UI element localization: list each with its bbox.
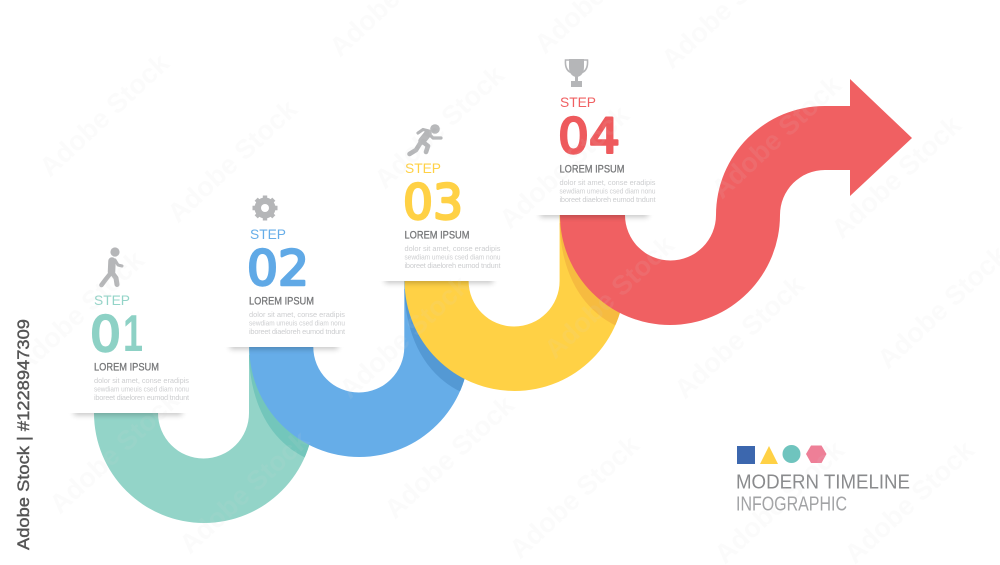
step 1 text block [94, 362, 189, 402]
step 2 text block [249, 296, 345, 336]
step 3 text block [404, 230, 501, 270]
icon: running person [410, 124, 441, 154]
step 4 label: STEP [560, 94, 596, 110]
step 4 number: 04 [558, 109, 620, 165]
panel: step 4 card [530, 100, 660, 217]
icon: walking person [102, 247, 122, 285]
watermark: stock id vertical text: Adobe Stock | #1228947309 [14, 319, 33, 550]
step 2 text block: sewdiam umeuis csed diam nonu [249, 318, 345, 328]
step 3 text block: sewdiam umeuis csed diam nonu [404, 252, 500, 262]
panel: step 1 card [60, 270, 190, 415]
step 3 text block: dolor sit amet, conse eradipis [404, 244, 501, 253]
watermark pattern: Adobe Stock [826, 109, 967, 244]
arrow: step 4 red S-curve [560, 79, 912, 325]
legend shapes [737, 445, 826, 464]
watermark pattern: Adobe Stock [34, 47, 175, 182]
step 2 label: STEP [250, 226, 286, 242]
step 4 text block: iboreet diaeloreh eumod tndunt [560, 195, 656, 204]
step 1 text block: iboreet diaeloren eumod tndunt [94, 393, 189, 402]
step 4 text block [560, 164, 656, 204]
watermark pattern: Adobe Stock [44, 384, 185, 519]
watermark pattern: Adobe Stock [669, 269, 810, 404]
watermark pattern: Adobe Stock [539, 229, 680, 364]
watermark pattern: Adobe Stock [494, 99, 635, 234]
watermark pattern: Adobe Stock [706, 69, 847, 204]
step 1 label: STEP [94, 292, 130, 308]
step 2 text block: dolor sit amet, conse eradipis [249, 310, 345, 319]
watermark pattern: Adobe Stock [162, 93, 303, 228]
step 1 number [90, 305, 143, 363]
step 4 text block: dolor sit amet, conse eradipis [560, 178, 656, 187]
step 3 number: 03 [403, 175, 463, 231]
step 1 text block: LOREM IPSUM [94, 362, 159, 374]
panel: step 3 card [376, 170, 504, 283]
step 4 text block: LOREM IPSUM [560, 164, 624, 176]
icon: trophy [565, 59, 588, 87]
step 3 text block: iboreet diaeloreh eumod tndunt [404, 261, 500, 270]
band: step 1 green arc [94, 347, 310, 523]
icon: gear [252, 196, 278, 220]
watermark pattern: Adobe Stock [174, 424, 315, 559]
heading: modern timeline: MODERN TIMELINE [736, 472, 910, 494]
step 4 text block: sewdiam umeuis csed diam nonu [560, 186, 656, 196]
step 2 text block: iboreet diaeloreh eumod tndunt [249, 327, 345, 336]
step 3 label: STEP [405, 160, 441, 176]
watermark pattern: Adobe Stock [369, 59, 510, 194]
step 3 text block: LOREM IPSUM [404, 230, 470, 242]
step 2 text block: LOREM IPSUM [249, 296, 314, 308]
watermark pattern: Adobe Stock [379, 389, 520, 524]
panel: step 2 card [220, 240, 348, 349]
step 1 text block: dolor sit amet, conse eradipis [94, 376, 189, 385]
band: step 2 blue arc [249, 281, 464, 457]
watermark pattern: Adobe Stock [9, 244, 150, 379]
step 2 number: 02 [247, 241, 309, 297]
heading: infographic: INFOGRAPHIC [736, 494, 847, 516]
step 1 text block: sewdiam umeuis csed diam nonu [94, 384, 189, 394]
step 1 number: 1 [123, 305, 143, 363]
watermark pattern: Adobe Stock [334, 269, 475, 404]
watermark pattern: Adobe Stock [504, 429, 645, 564]
band: step 3 yellow arc [404, 215, 620, 391]
step 1 number: 0 [90, 307, 121, 363]
